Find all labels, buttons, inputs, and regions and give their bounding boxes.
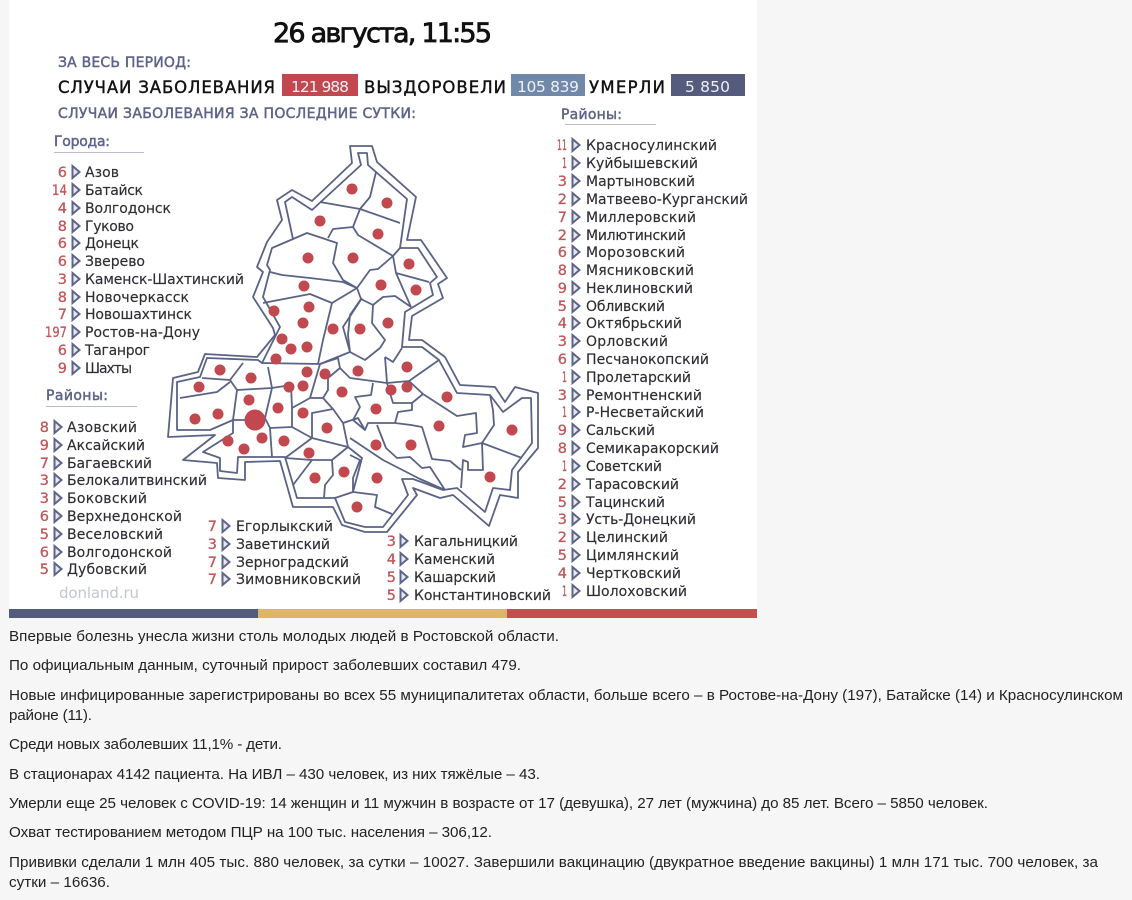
list: districts right: 9 bbox=[558, 423, 567, 439]
list: districts right: 2 bbox=[558, 192, 567, 208]
list: districts right: 3 bbox=[558, 512, 567, 528]
list: districts right: 3 bbox=[558, 388, 567, 404]
map of Rostov region bbox=[168, 146, 538, 532]
list: cities: 3 bbox=[58, 272, 67, 288]
list: districts middle: 7 bbox=[208, 572, 217, 588]
totals row: УМЕРЛИ bbox=[589, 78, 665, 97]
list: cities: Шахты bbox=[85, 361, 132, 377]
list: districts right: Пролетарский bbox=[586, 370, 691, 386]
list: districts middle: Зимовниковский bbox=[236, 572, 361, 588]
article text: Прививки сделали 1 млн 405 тыс. 880 человек, за сутки – 10027. Завершили вакцинацию (двукратное введение вакцины) 1 млн 171 тыс. 700 человек, за bbox=[9, 854, 1099, 871]
list: districts right: Мясниковский bbox=[586, 263, 694, 279]
list: districts left: Азовский bbox=[67, 420, 137, 436]
list: districts left: 8 bbox=[40, 420, 49, 436]
list: cities: 6 bbox=[58, 236, 67, 252]
list: districts right: Ремонтненский bbox=[586, 388, 702, 404]
list: districts middle: Зерноградский bbox=[236, 555, 349, 571]
list: districts right: 8 bbox=[558, 263, 567, 279]
title: 26 августа, 11:55 bbox=[273, 18, 492, 49]
list: districts left: 6 bbox=[40, 509, 49, 525]
list: districts right: 2 bbox=[558, 530, 567, 546]
article text: Новые инфицированные зарегистрированы во всех 55 муниципалитетах области, больше всего – в Ростове-на-Дону (197), Батайске (14) и Красносулинском bbox=[9, 687, 1123, 704]
map: case markers bbox=[190, 184, 518, 512]
list: cities: Новошахтинск bbox=[85, 307, 192, 323]
list: districts right: 1 bbox=[562, 459, 567, 475]
list: districts third: 4 bbox=[387, 552, 396, 568]
list: districts right: Целинский bbox=[586, 530, 668, 546]
article text: По официальным данным, суточный прирост заболевших составил 479. bbox=[9, 657, 521, 674]
list: districts right: Сальский bbox=[586, 423, 655, 439]
list: districts third: Кашарский bbox=[414, 570, 496, 586]
list: districts right: 1 bbox=[562, 370, 567, 386]
list: districts right: Р-Несветайский bbox=[586, 405, 704, 421]
heading: districts right: Районы: bbox=[561, 107, 622, 123]
list: districts right: 2 bbox=[558, 477, 567, 493]
list: cities: 6 bbox=[58, 254, 67, 270]
list: districts right: Морозовский bbox=[586, 245, 685, 261]
totals row: 105 839 bbox=[517, 78, 579, 96]
list: districts middle: 3 bbox=[208, 537, 217, 553]
heading: districts right bbox=[561, 107, 656, 124]
totals row: 121 988 bbox=[291, 78, 349, 96]
list: districts right: Красносулинский bbox=[586, 138, 717, 154]
heading: cities: Города: bbox=[54, 134, 110, 150]
list: districts right: 5 bbox=[558, 548, 567, 564]
list: districts left: 6 bbox=[40, 545, 49, 561]
list: districts right: 3 bbox=[558, 334, 567, 350]
list: districts right: Шолоховский bbox=[586, 584, 687, 600]
list: cities: 7 bbox=[58, 307, 67, 323]
list: districts right: Песчанокопский bbox=[586, 352, 709, 368]
list: districts right: 1 bbox=[562, 584, 567, 600]
list: districts right bbox=[557, 138, 748, 600]
list: cities: 14 bbox=[52, 183, 67, 199]
list: districts left: Верхнедонской bbox=[67, 509, 182, 525]
list: districts right: 8 bbox=[558, 441, 567, 457]
list: districts right: Тарасовский bbox=[585, 477, 679, 493]
article text: Умерли еще 25 человек с COVID-19: 14 женщин и 11 мужчин в возрасте от 17 (девушка), 27 лет (мужчина) до 85 лет. Всего – 5850 человек. bbox=[9, 795, 988, 812]
list: cities: Донецк bbox=[85, 236, 139, 252]
list: districts middle: Егорлыкский bbox=[236, 519, 333, 535]
list: cities: Таганрог bbox=[84, 343, 150, 359]
list: districts right: Семикаракорский bbox=[586, 441, 719, 457]
list: cities: 4 bbox=[58, 201, 67, 217]
article text: районе (11). bbox=[9, 707, 92, 724]
article text: Охват тестированием методом ПЦР на 100 тыс. населения – 306,12. bbox=[9, 824, 492, 841]
article text: Впервые болезнь унесла жизни столь молодых людей в Ростовской области. bbox=[9, 628, 559, 645]
list: districts right: 1 bbox=[562, 156, 567, 172]
list: districts middle: 7 bbox=[208, 519, 217, 535]
list: districts right: 4 bbox=[558, 566, 567, 582]
list: districts right: 6 bbox=[558, 352, 567, 368]
list: districts third bbox=[387, 534, 551, 604]
list: districts right: Тацинский bbox=[585, 495, 665, 511]
map: outer border bbox=[168, 146, 538, 532]
tricolor stripe bbox=[9, 609, 757, 618]
list: districts left: Боковский bbox=[67, 491, 147, 507]
list: districts left: Волгодонской bbox=[67, 545, 172, 561]
list: districts left: Багаевский bbox=[67, 456, 152, 472]
list: cities bbox=[45, 165, 244, 377]
list: cities: 197 bbox=[45, 325, 67, 341]
list: cities: 8 bbox=[58, 290, 67, 306]
totals row: 5 850 bbox=[685, 78, 730, 96]
heading: last day: СЛУЧАИ ЗАБОЛЕВАНИЯ ЗА ПОСЛЕДНИЕ СУТКИ: bbox=[58, 106, 416, 122]
map: inner border bbox=[177, 153, 532, 527]
article text: сутки – 16636. bbox=[9, 874, 110, 891]
list: districts left: 7 bbox=[40, 456, 49, 472]
article text bbox=[9, 628, 1123, 891]
list: cities: 6 bbox=[58, 343, 67, 359]
list: districts left: 5 bbox=[40, 527, 49, 543]
totals row: ВЫЗДОРОВЕЛИ bbox=[364, 78, 506, 97]
list: cities: Батайск bbox=[85, 183, 143, 199]
list: districts left: 5 bbox=[40, 562, 49, 578]
list: districts left: 9 bbox=[40, 438, 49, 454]
list: districts right: 5 bbox=[558, 495, 567, 511]
article text: В стационарах 4142 пациента. На ИВЛ – 430 человек, из них тяжёлые – 43. bbox=[9, 766, 540, 783]
list: districts right: Чертковский bbox=[586, 566, 681, 582]
list: districts left bbox=[40, 420, 207, 578]
list: cities: Волгодонск bbox=[85, 201, 171, 217]
list: districts middle bbox=[208, 519, 361, 588]
list: cities: Азов bbox=[85, 165, 119, 181]
list: districts right: 11 bbox=[557, 138, 567, 154]
heading: districts left: Районы: bbox=[46, 388, 108, 404]
list: districts right: Милютинский bbox=[586, 228, 686, 244]
list: districts left: 3 bbox=[40, 473, 49, 489]
list: districts right: 5 bbox=[558, 299, 567, 315]
list: cities: Каменск-Шахтинский bbox=[85, 272, 244, 288]
totals row bbox=[58, 74, 745, 97]
heading: districts left bbox=[46, 388, 137, 406]
list: districts right: 2 bbox=[558, 228, 567, 244]
list: districts right: 3 bbox=[558, 174, 567, 190]
list: cities: Ростов-на-Дону bbox=[85, 325, 200, 341]
list: districts third: Константиновский bbox=[414, 588, 551, 604]
source: donland.ru: donland.ru bbox=[59, 584, 139, 602]
totals row: СЛУЧАИ ЗАБОЛЕВАНИЯ bbox=[58, 78, 275, 97]
heading: cities bbox=[54, 134, 144, 152]
list: districts third: Кагальницкий bbox=[414, 534, 518, 550]
list: districts right: Мартыновский bbox=[586, 174, 695, 190]
list: districts third: Каменский bbox=[414, 552, 495, 568]
panel: infographic bbox=[9, 0, 757, 618]
list: cities: Гуково bbox=[85, 219, 134, 235]
list: districts right: Усть-Донецкий bbox=[586, 512, 696, 528]
list: cities: Новочеркасск bbox=[85, 290, 189, 306]
list: districts right: Цимлянский bbox=[586, 548, 679, 564]
list: districts left: Аксайский bbox=[67, 438, 145, 454]
list: districts right: 9 bbox=[558, 281, 567, 297]
article text: Среди новых заболевших 11,1% - дети. bbox=[9, 736, 282, 753]
list: districts middle: Заветинский bbox=[236, 537, 330, 553]
list: districts right: Неклиновский bbox=[586, 281, 693, 297]
list: districts right: 6 bbox=[558, 245, 567, 261]
list: districts right: Матвеево-Курганский bbox=[586, 192, 748, 208]
list: districts third: 5 bbox=[387, 588, 396, 604]
list: districts right: 1 bbox=[562, 405, 567, 421]
heading: whole period: ЗА ВЕСЬ ПЕРИОД: bbox=[58, 55, 191, 71]
list: districts third: 3 bbox=[387, 534, 396, 550]
list: districts right: Миллеровский bbox=[586, 210, 696, 226]
list: districts left: Дубовский bbox=[67, 562, 147, 578]
list: districts right: Советский bbox=[586, 459, 662, 475]
list: districts third: 5 bbox=[387, 570, 396, 586]
list: districts right: 4 bbox=[558, 316, 567, 332]
list: districts left: Белокалитвинский bbox=[67, 473, 207, 489]
list: cities: 6 bbox=[58, 165, 67, 181]
list: districts middle: 7 bbox=[208, 555, 217, 571]
list: districts right: Обливский bbox=[586, 299, 665, 315]
list: districts right: Октябрьский bbox=[586, 316, 682, 332]
list: cities: Зверево bbox=[85, 254, 145, 270]
list: districts right: Куйбышевский bbox=[586, 156, 698, 172]
list: districts left: Веселовский bbox=[67, 527, 163, 543]
list: districts right: 7 bbox=[558, 210, 567, 226]
list: cities: 9 bbox=[58, 361, 67, 377]
list: districts left: 3 bbox=[40, 491, 49, 507]
list: cities: 8 bbox=[58, 219, 67, 235]
list: districts right: Орловский bbox=[586, 334, 668, 350]
map: district borders bbox=[180, 172, 522, 514]
